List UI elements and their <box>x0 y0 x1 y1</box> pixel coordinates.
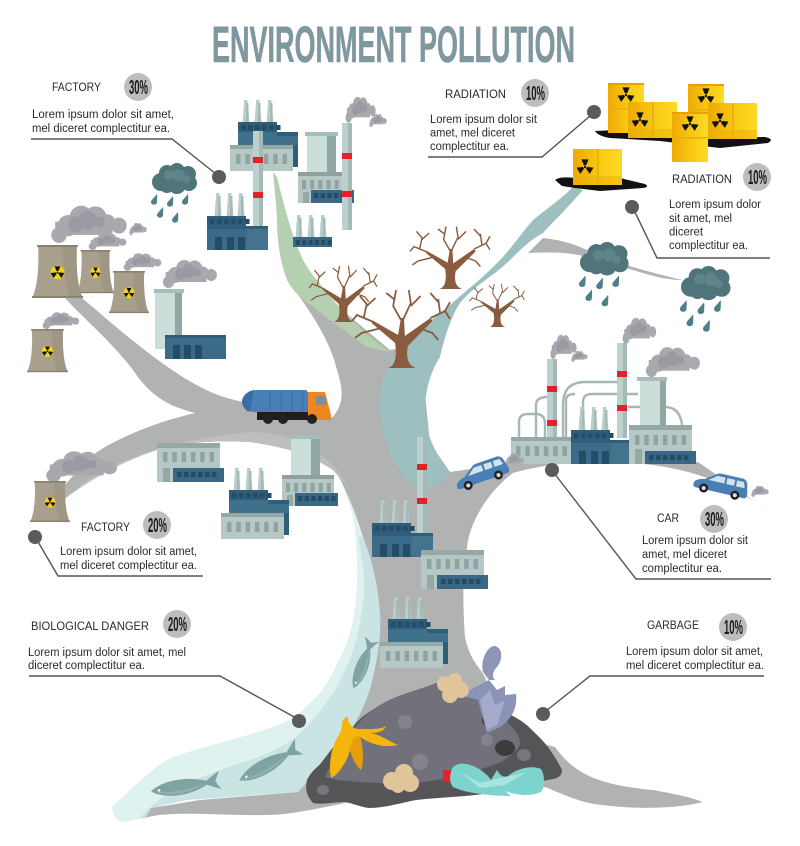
body text <box>626 646 764 672</box>
heading: BIOLOGICAL DANGER <box>31 621 149 633</box>
body text: complectitur ea. <box>642 563 722 575</box>
tree body <box>58 238 770 818</box>
plastic bag <box>460 646 516 733</box>
badge: 30% <box>129 77 148 99</box>
oil pool <box>595 129 771 148</box>
badge <box>163 610 191 638</box>
callout: biological danger <box>28 610 306 728</box>
right factory complex <box>511 318 700 464</box>
light building <box>511 437 571 464</box>
garbage heap <box>306 646 562 808</box>
badge: 10% <box>724 617 743 639</box>
leader line <box>28 530 203 576</box>
crumpled paper <box>437 673 469 703</box>
callout: factory 20% <box>28 511 203 576</box>
body text <box>60 546 197 572</box>
body text: Lorem ipsum dolor sit <box>430 114 538 126</box>
heading: FACTORY <box>81 522 130 534</box>
badge <box>700 505 728 533</box>
body text: diceret <box>669 226 704 238</box>
badge: 20% <box>168 614 187 636</box>
body text: Lorem ipsum dolor sit amet, <box>626 646 763 658</box>
nuclear plants with smoke <box>27 206 161 522</box>
teal stream <box>380 187 583 488</box>
crumpled paper <box>383 764 419 793</box>
badge: 20% <box>148 515 167 537</box>
banana peel <box>330 717 398 778</box>
body text <box>32 109 174 135</box>
badge: 30% <box>705 509 724 531</box>
callout: radiation right <box>625 163 771 258</box>
body text <box>28 647 186 672</box>
polluted water <box>112 488 380 822</box>
body text: complectitur ea. <box>430 141 509 153</box>
badge <box>743 163 771 191</box>
body text: Lorem ipsum dolor sit amet, <box>32 109 174 121</box>
body text: Lorem ipsum dolor sit amet, <box>60 546 197 558</box>
leader line <box>428 105 601 157</box>
body text: amet, mel diceret <box>430 128 516 140</box>
heading: RADIATION <box>445 89 506 101</box>
factories on the trunk <box>157 435 488 668</box>
small factory <box>293 215 332 247</box>
body text: mel diceret complectitur ea. <box>32 123 170 135</box>
pipes <box>519 382 682 438</box>
heading: GARBAGE <box>647 620 699 632</box>
tree: polluted trunk, branches and rivers <box>58 172 770 822</box>
body text <box>430 114 538 153</box>
silo factory <box>154 260 226 359</box>
badge <box>124 73 152 101</box>
callout: radiation left <box>428 79 601 157</box>
body text: amet, mel diceret <box>642 549 728 561</box>
leader line <box>536 676 764 721</box>
badge: 10% <box>526 83 545 105</box>
callout: garbage <box>536 613 764 721</box>
callout: car <box>545 463 771 579</box>
leader line <box>31 139 226 184</box>
plastic bottle <box>443 764 544 796</box>
deeper water <box>140 537 380 818</box>
silo building <box>629 377 696 464</box>
body text: complectitur ea. <box>669 240 748 252</box>
cars <box>452 453 769 502</box>
body text <box>642 535 749 575</box>
body text: mel diceret complectitur ea. <box>60 560 197 572</box>
body text: mel diceret complectitur ea. <box>626 660 764 672</box>
body text <box>669 199 761 252</box>
smokestack <box>547 359 557 437</box>
radioactive barrels <box>555 83 771 191</box>
body text: diceret complectitur ea. <box>28 660 145 672</box>
badge <box>719 613 747 641</box>
dead trees <box>309 227 524 368</box>
green stream <box>273 172 390 352</box>
body text: sit amet, mel <box>669 213 732 225</box>
leader line <box>625 200 770 258</box>
acid rain clouds <box>151 163 730 332</box>
oil pool <box>555 177 647 191</box>
body text: Lorem ipsum dolor sit amet, mel <box>28 647 186 659</box>
fish <box>149 636 379 799</box>
smokestack <box>417 437 427 533</box>
body text: Lorem ipsum dolor <box>669 199 761 211</box>
heading: FACTORY <box>52 82 101 94</box>
heading: RADIATION <box>672 174 732 186</box>
callout: factory 30% <box>31 73 226 184</box>
body text: Lorem ipsum dolor sit <box>642 535 749 547</box>
heading: CAR <box>657 513 679 525</box>
garbage truck <box>242 390 331 424</box>
leader line <box>545 463 771 579</box>
smokestack <box>253 131 263 226</box>
leader line <box>29 676 306 728</box>
badge <box>521 79 549 107</box>
top factory cluster <box>207 97 387 250</box>
badge: 10% <box>748 167 767 189</box>
badge <box>143 511 171 539</box>
smokestack <box>342 123 352 230</box>
smokestack <box>617 343 627 438</box>
